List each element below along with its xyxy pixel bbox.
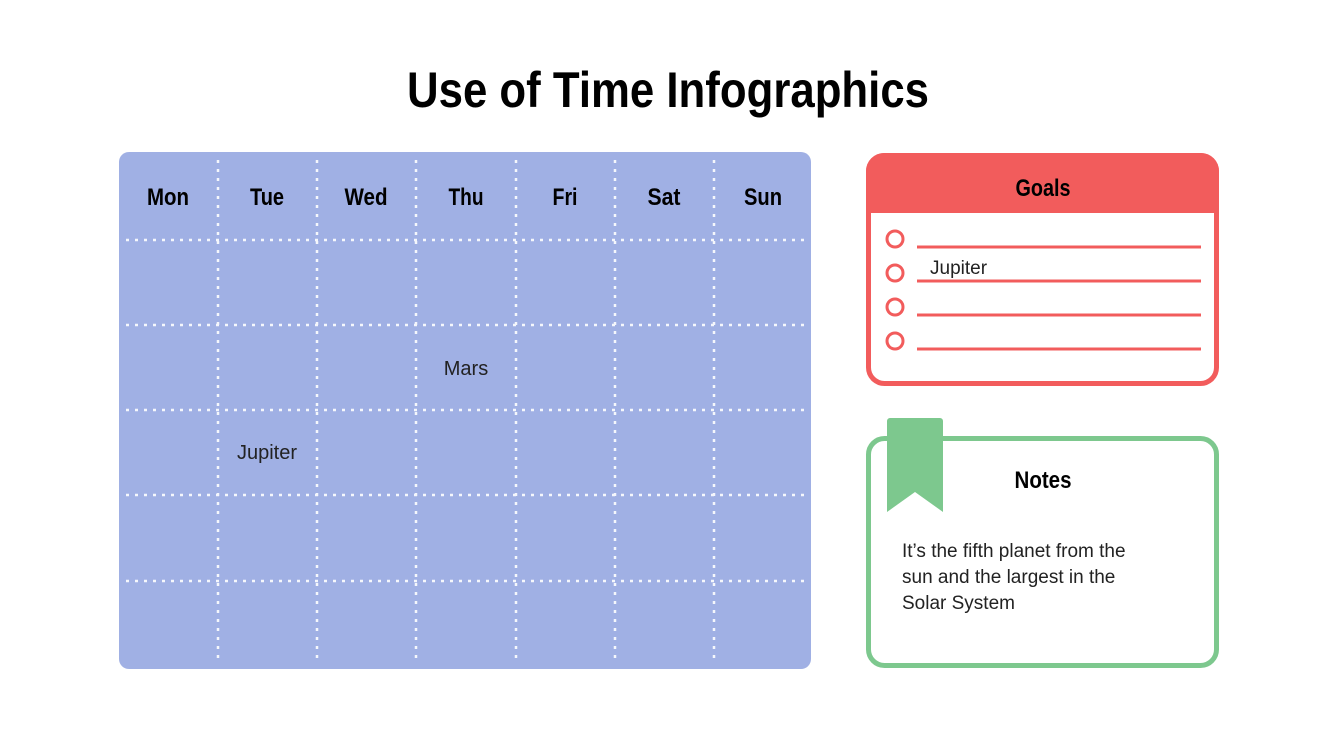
- notes heading: Notes: [1014, 467, 1072, 494]
- checklist: [887, 231, 1201, 349]
- day headers: Mon: [147, 184, 189, 211]
- entry: Mars: Mars: [444, 358, 488, 380]
- day headers: Sun: [744, 184, 782, 211]
- notes text: It’s the fifth planet from the: [902, 541, 1126, 562]
- panel: goals: Jupiter: [930, 258, 988, 279]
- day headers: Tue: [250, 184, 284, 211]
- icon: bookmark: [887, 418, 943, 512]
- title: Use of Time Infographics: [407, 62, 929, 118]
- panel: notes: [868, 418, 1216, 666]
- notes text: Solar System: [902, 593, 1015, 614]
- panel: goals: [866, 153, 1219, 384]
- goals heading: Goals: [1016, 175, 1070, 202]
- day headers: [147, 184, 782, 211]
- day headers: Sat: [648, 184, 680, 211]
- notes text: sun and the largest in the: [902, 567, 1115, 588]
- panel: calendar: [119, 152, 811, 669]
- day headers: Thu: [448, 184, 484, 211]
- entry: Jupiter: Jupiter: [237, 442, 297, 464]
- day headers: Wed: [344, 184, 388, 211]
- day headers: Fri: [552, 184, 578, 211]
